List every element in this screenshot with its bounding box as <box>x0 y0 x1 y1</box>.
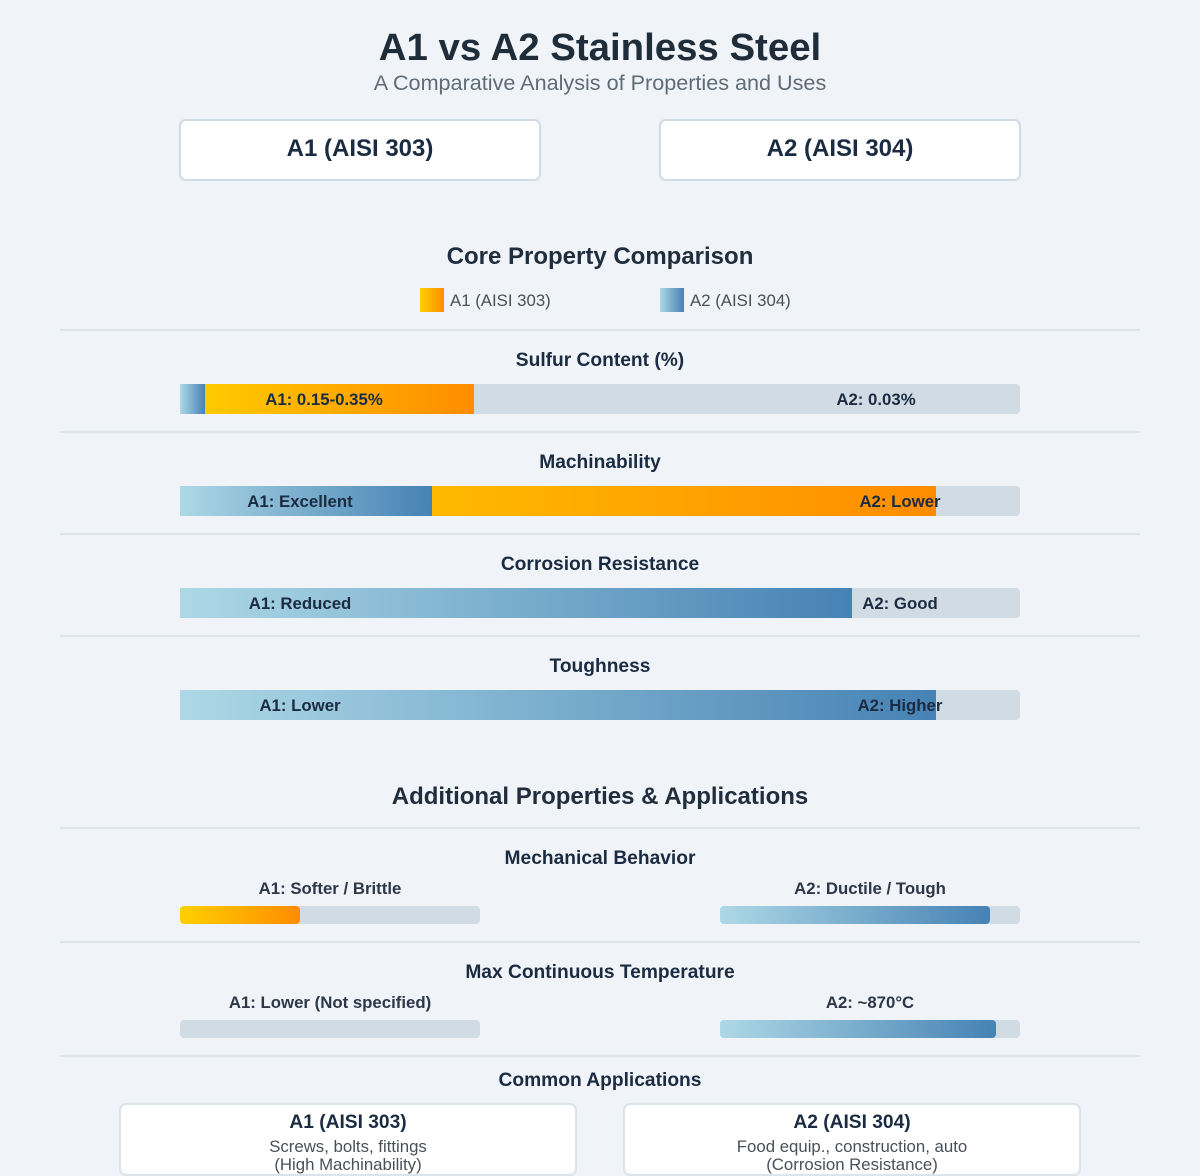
row: mechanical behavior: Mechanical Behavior <box>505 848 696 869</box>
header card: A2: A2 (AISI 304) <box>767 135 913 162</box>
row: toughness <box>180 656 1020 720</box>
legend: A2: A2 (AISI 304) <box>690 291 791 310</box>
row: mechanical behavior: A1: Softer / Brittle <box>259 879 401 898</box>
row: max continuous temperature: A2: ~870°C <box>826 993 914 1012</box>
heading: common applications: Common Applications <box>499 1070 701 1091</box>
header card: A1 <box>180 120 540 180</box>
application card: A2: A2 (AISI 304) <box>793 1112 911 1133</box>
legend: A1 <box>420 288 551 312</box>
application card: A1: (High Machinability) <box>274 1155 422 1174</box>
row: max continuous temperature: A1: Lower (Not specified) <box>229 993 431 1012</box>
legend: A1: A1 (AISI 303) <box>450 291 551 310</box>
row: mechanical behavior: A2: Ductile / Tough <box>794 879 946 898</box>
row: sulfur content: A1: 0.15-0.35% <box>265 390 383 409</box>
row: sulfur content: A2: 0.03% <box>836 390 916 409</box>
application card: A2: Food equip., construction, auto <box>737 1137 967 1156</box>
row: corrosion resistance: A2: Good <box>862 594 938 613</box>
row: max continuous temperature <box>180 962 1020 1038</box>
application card: A2: (Corrosion Resistance) <box>766 1155 938 1174</box>
row: machinability: A1: Excellent <box>247 492 353 511</box>
row: machinability: A2: Lower <box>859 492 941 511</box>
row: sulfur content <box>180 350 1020 414</box>
application card: A1: Screws, bolts, fittings <box>269 1137 427 1156</box>
header card: A1: A1 (AISI 303) <box>287 135 433 162</box>
application card: A2 <box>624 1104 1080 1175</box>
heading: core property comparison: Core Property Comparison <box>447 243 753 270</box>
row: corrosion resistance <box>180 554 1020 618</box>
row: corrosion resistance: A1: Reduced <box>249 594 351 613</box>
row: toughness: A2: Higher <box>858 696 943 715</box>
row: max continuous temperature: Max Continuous Temperature <box>465 962 735 983</box>
row: mechanical behavior <box>180 848 1020 924</box>
application card: A1 <box>120 1104 576 1175</box>
row: toughness: Toughness <box>550 656 650 677</box>
subtitle: A Comparative Analysis of Properties and Uses <box>374 70 826 95</box>
header card: A2 <box>660 120 1020 180</box>
legend: A2 <box>660 288 791 312</box>
row: machinability: Machinability <box>539 452 661 473</box>
heading: additional properties: Additional Properties & Applications <box>392 783 808 810</box>
row: toughness: A1: Lower <box>259 696 341 715</box>
row: sulfur content: Sulfur Content (%) <box>516 350 684 371</box>
row: corrosion resistance: Corrosion Resistance <box>501 554 699 575</box>
row: machinability <box>180 452 1020 516</box>
title: A1 vs A2 Stainless Steel <box>379 26 821 69</box>
application card: A1: A1 (AISI 303) <box>289 1112 407 1133</box>
